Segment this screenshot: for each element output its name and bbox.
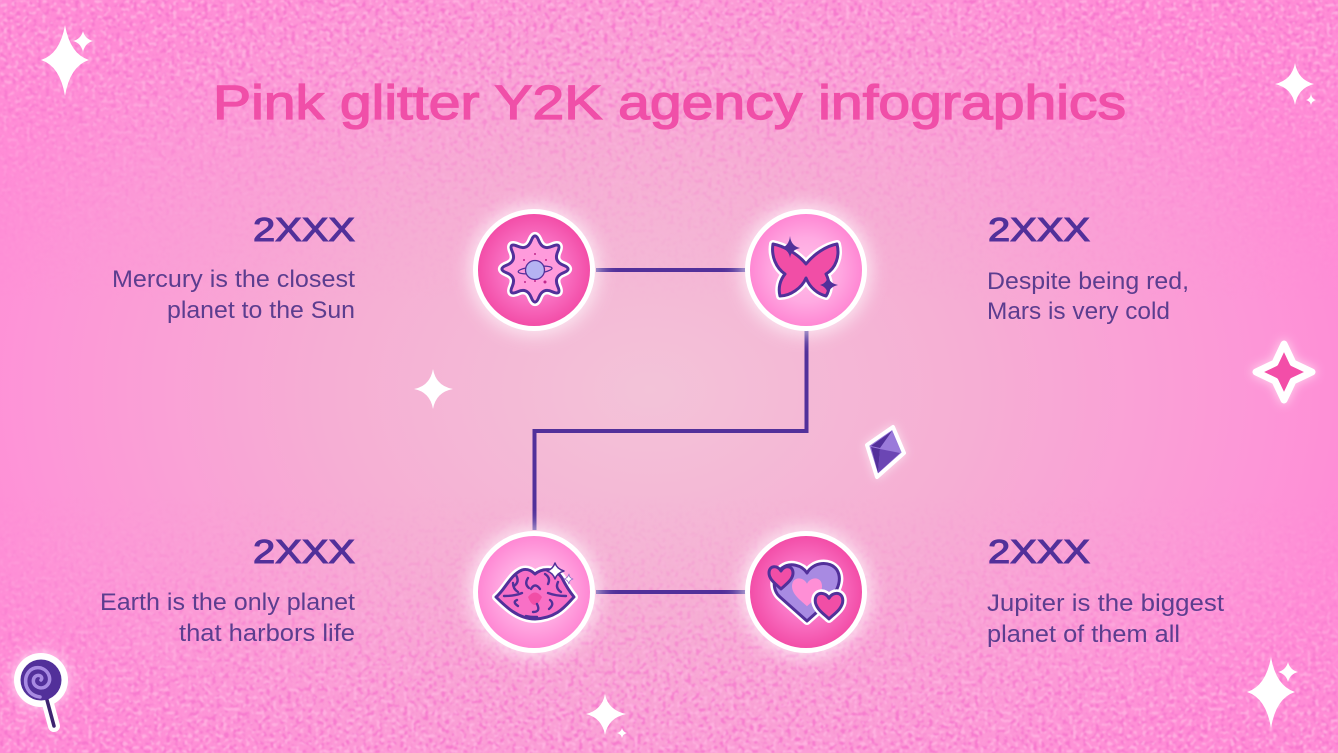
icon: purple crystal: [867, 427, 904, 477]
text block: Jupiter: planet of them all: [987, 621, 1180, 648]
connector lines: [534, 270, 806, 592]
text block: Mercury: Mercury is the closest: [112, 266, 355, 293]
node 4: hearts badge: [741, 527, 871, 657]
node 1: planet badge: [469, 205, 599, 335]
text block: Earth: Earth is the only planet: [100, 589, 355, 616]
text block: Mars: Despite being red,: [987, 268, 1189, 295]
text block: Earth: 2XXX: [253, 533, 355, 570]
text block: Mars: [987, 211, 1189, 325]
icon: pink star: [1256, 344, 1312, 400]
sparkle: bottom right: [1247, 657, 1298, 728]
title: Pink glitter Y2K agency infographics: [213, 77, 1126, 130]
text block: Mercury: [112, 211, 355, 324]
text block: Mars: 2XXX: [988, 211, 1090, 248]
sparkle: top right: [1275, 63, 1316, 105]
icon: lollipop: [11, 650, 71, 726]
icon: leopard lips: [496, 563, 574, 619]
text block: Earth: [100, 533, 355, 647]
text block: Jupiter: 2XXX: [988, 533, 1090, 570]
text block: Mercury: 2XXX: [253, 211, 355, 248]
text block: Mercury: planet to the Sun: [167, 297, 355, 324]
sparkle: bottom center: [586, 694, 627, 738]
icon: planet in wavy flower: [502, 236, 568, 302]
text block: Earth: that harbors life: [179, 620, 355, 647]
text block: Jupiter: [987, 533, 1224, 648]
sparkle: center: [414, 369, 453, 409]
node 3: lips badge: [469, 527, 599, 657]
icon: hearts: [769, 564, 843, 621]
text block: Mars: Mars is very cold: [987, 298, 1170, 325]
icon: butterfly: [773, 236, 838, 296]
text block: Jupiter: Jupiter is the biggest: [987, 590, 1224, 617]
node 2: butterfly badge: [741, 205, 871, 335]
sparkle: top left: [41, 25, 93, 96]
